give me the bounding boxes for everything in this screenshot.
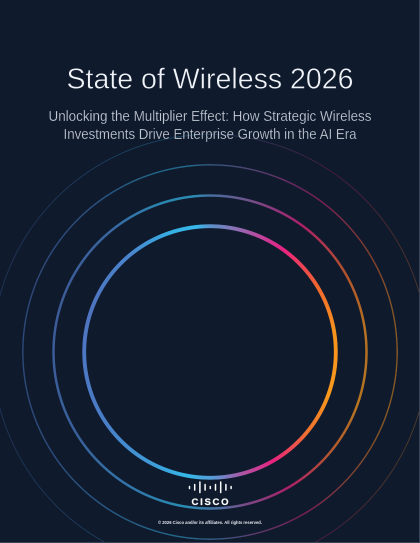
title: State of Wireless 2026	[66, 64, 354, 96]
copyright: © 2026 Cisco and/or its affiliates. All rights reserved.	[158, 520, 262, 525]
logo wordmark: CISCO	[192, 497, 228, 508]
ring: second	[52, 194, 368, 510]
ring: inner bright	[82, 224, 338, 480]
ring: third	[22, 164, 398, 540]
subtitle	[48, 108, 372, 143]
icon: cisco logo	[190, 482, 231, 508]
ring: outermost	[0, 134, 420, 543]
subtitle: Investments Drive Enterprise Growth in the AI Era	[64, 126, 357, 143]
logo bars	[190, 482, 231, 492]
subtitle: Unlocking the Multiplier Effect: How Strategic Wireless	[48, 108, 372, 125]
